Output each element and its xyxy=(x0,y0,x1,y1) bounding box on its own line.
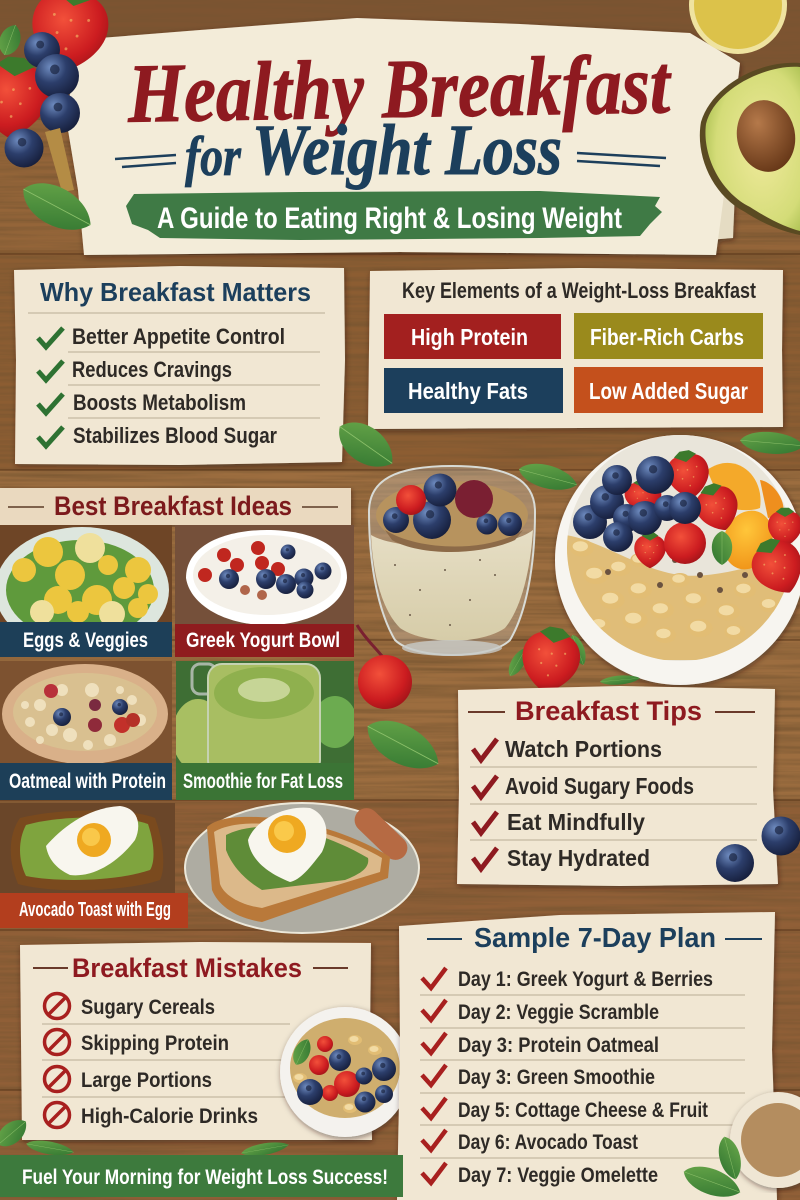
panel: key elements xyxy=(368,268,783,429)
header: best breakfast ideas xyxy=(0,488,351,525)
title line: Weight Loss: Weight Loss xyxy=(252,110,562,190)
tag: fiber-rich carbs: Fiber-Rich Carbs xyxy=(590,324,744,350)
lemon slice xyxy=(689,0,787,54)
card: smoothie for fat loss xyxy=(172,661,357,800)
list: tips: Eat Mindfully xyxy=(507,809,645,835)
list: plan days: Day 5: Cottage Cheese & Fruit xyxy=(458,1099,708,1122)
footer banner: Fuel Your Morning for Weight Loss Success! xyxy=(22,1166,388,1189)
label: Avocado Toast with Egg xyxy=(19,899,171,921)
list: plan days xyxy=(422,968,713,1187)
list: plan days: Day 3: Green Smoothie xyxy=(458,1066,655,1089)
subtitle banner: A Guide to Eating Right & Losing Weight xyxy=(157,202,622,235)
list: tips: Avoid Sugary Foods xyxy=(505,773,694,799)
small bowl xyxy=(280,1007,410,1137)
list: mistakes xyxy=(44,994,258,1128)
check list: why breakfast matters: Reduces Cravings xyxy=(72,357,232,382)
leaves middle xyxy=(330,412,800,496)
blueberries right xyxy=(716,816,800,882)
heading: breakfast tips: Breakfast Tips xyxy=(515,696,702,726)
list: tips: Watch Portions xyxy=(505,736,662,762)
title word: for: for xyxy=(185,126,242,188)
card: avocado toast with egg xyxy=(0,803,188,928)
label xyxy=(175,624,354,657)
panel: why breakfast matters xyxy=(14,266,345,465)
avocado xyxy=(700,63,800,235)
tag: healthy fats xyxy=(384,368,563,413)
label: Smoothie for Fat Loss xyxy=(183,770,343,793)
label xyxy=(0,893,188,928)
list: mistakes: Large Portions xyxy=(81,1069,212,1092)
label: Eggs & Veggies xyxy=(23,629,148,652)
list: mistakes: Sugary Cereals xyxy=(81,996,215,1019)
plate: avocado toast xyxy=(185,803,419,933)
list: tips: Stay Hydrated xyxy=(507,845,650,871)
check list: why breakfast matters: Stabilizes Blood Sugar xyxy=(73,423,277,448)
tag: healthy fats: Healthy Fats xyxy=(408,378,528,404)
tag: fiber-rich carbs xyxy=(574,313,763,359)
card: oatmeal with protein xyxy=(0,661,172,800)
leaf top left xyxy=(14,172,100,242)
label: Greek Yogurt Bowl xyxy=(186,629,340,652)
title xyxy=(115,38,673,190)
list: plan days: Day 1: Greek Yogurt & Berries xyxy=(458,968,713,991)
coffee cup and leaves xyxy=(679,1092,800,1200)
heading: plan: Sample 7-Day Plan xyxy=(474,922,716,953)
panel: breakfast mistakes xyxy=(20,942,410,1140)
check list: why breakfast matters: Better Appetite Control xyxy=(72,324,285,349)
panel: sample 7-day plan xyxy=(397,912,777,1200)
list: plan days: Day 7: Veggie Omelette xyxy=(458,1164,658,1187)
list: tips xyxy=(473,736,694,871)
header: best breakfast ideas: Best Breakfast Ideas xyxy=(54,491,292,521)
fruit bowl xyxy=(555,435,800,685)
title line: Healthy Breakfast: Healthy Breakfast xyxy=(126,38,673,141)
panel: breakfast tips xyxy=(457,686,778,886)
berries top left xyxy=(0,0,114,192)
tag: high protein xyxy=(384,314,561,359)
small tomato and leaf xyxy=(357,625,447,781)
heading: breakfast mistakes: Breakfast Mistakes xyxy=(72,953,302,983)
leaves above footer xyxy=(0,1114,290,1159)
strawberry and leaves center xyxy=(504,623,640,698)
tag: high protein: High Protein xyxy=(411,324,528,350)
list: mistakes: High-Calorie Drinks xyxy=(81,1105,258,1128)
label: Oatmeal with Protein xyxy=(9,770,166,793)
check list: why breakfast matters xyxy=(38,324,285,448)
label xyxy=(0,763,172,800)
layered glass parfait xyxy=(369,466,535,656)
list: plan days: Day 3: Protein Oatmeal xyxy=(458,1034,659,1057)
list: plan days: Day 6: Avocado Toast xyxy=(458,1131,638,1154)
heading: why breakfast matters: Why Breakfast Matters xyxy=(40,277,311,307)
tag: low added sugar: Low Added Sugar xyxy=(589,378,748,404)
title paper xyxy=(68,18,740,255)
label xyxy=(182,763,342,788)
footer banner xyxy=(0,1155,403,1197)
card: eggs and veggies xyxy=(0,525,172,657)
list: mistakes: Skipping Protein xyxy=(81,1032,229,1055)
subtitle banner xyxy=(126,191,662,240)
tag: low added sugar xyxy=(574,367,763,413)
list: plan days: Day 2: Veggie Scramble xyxy=(458,1001,659,1024)
check list: why breakfast matters: Boosts Metabolism xyxy=(73,390,246,415)
card: greek yogurt bowl xyxy=(175,525,354,657)
label xyxy=(0,622,172,657)
